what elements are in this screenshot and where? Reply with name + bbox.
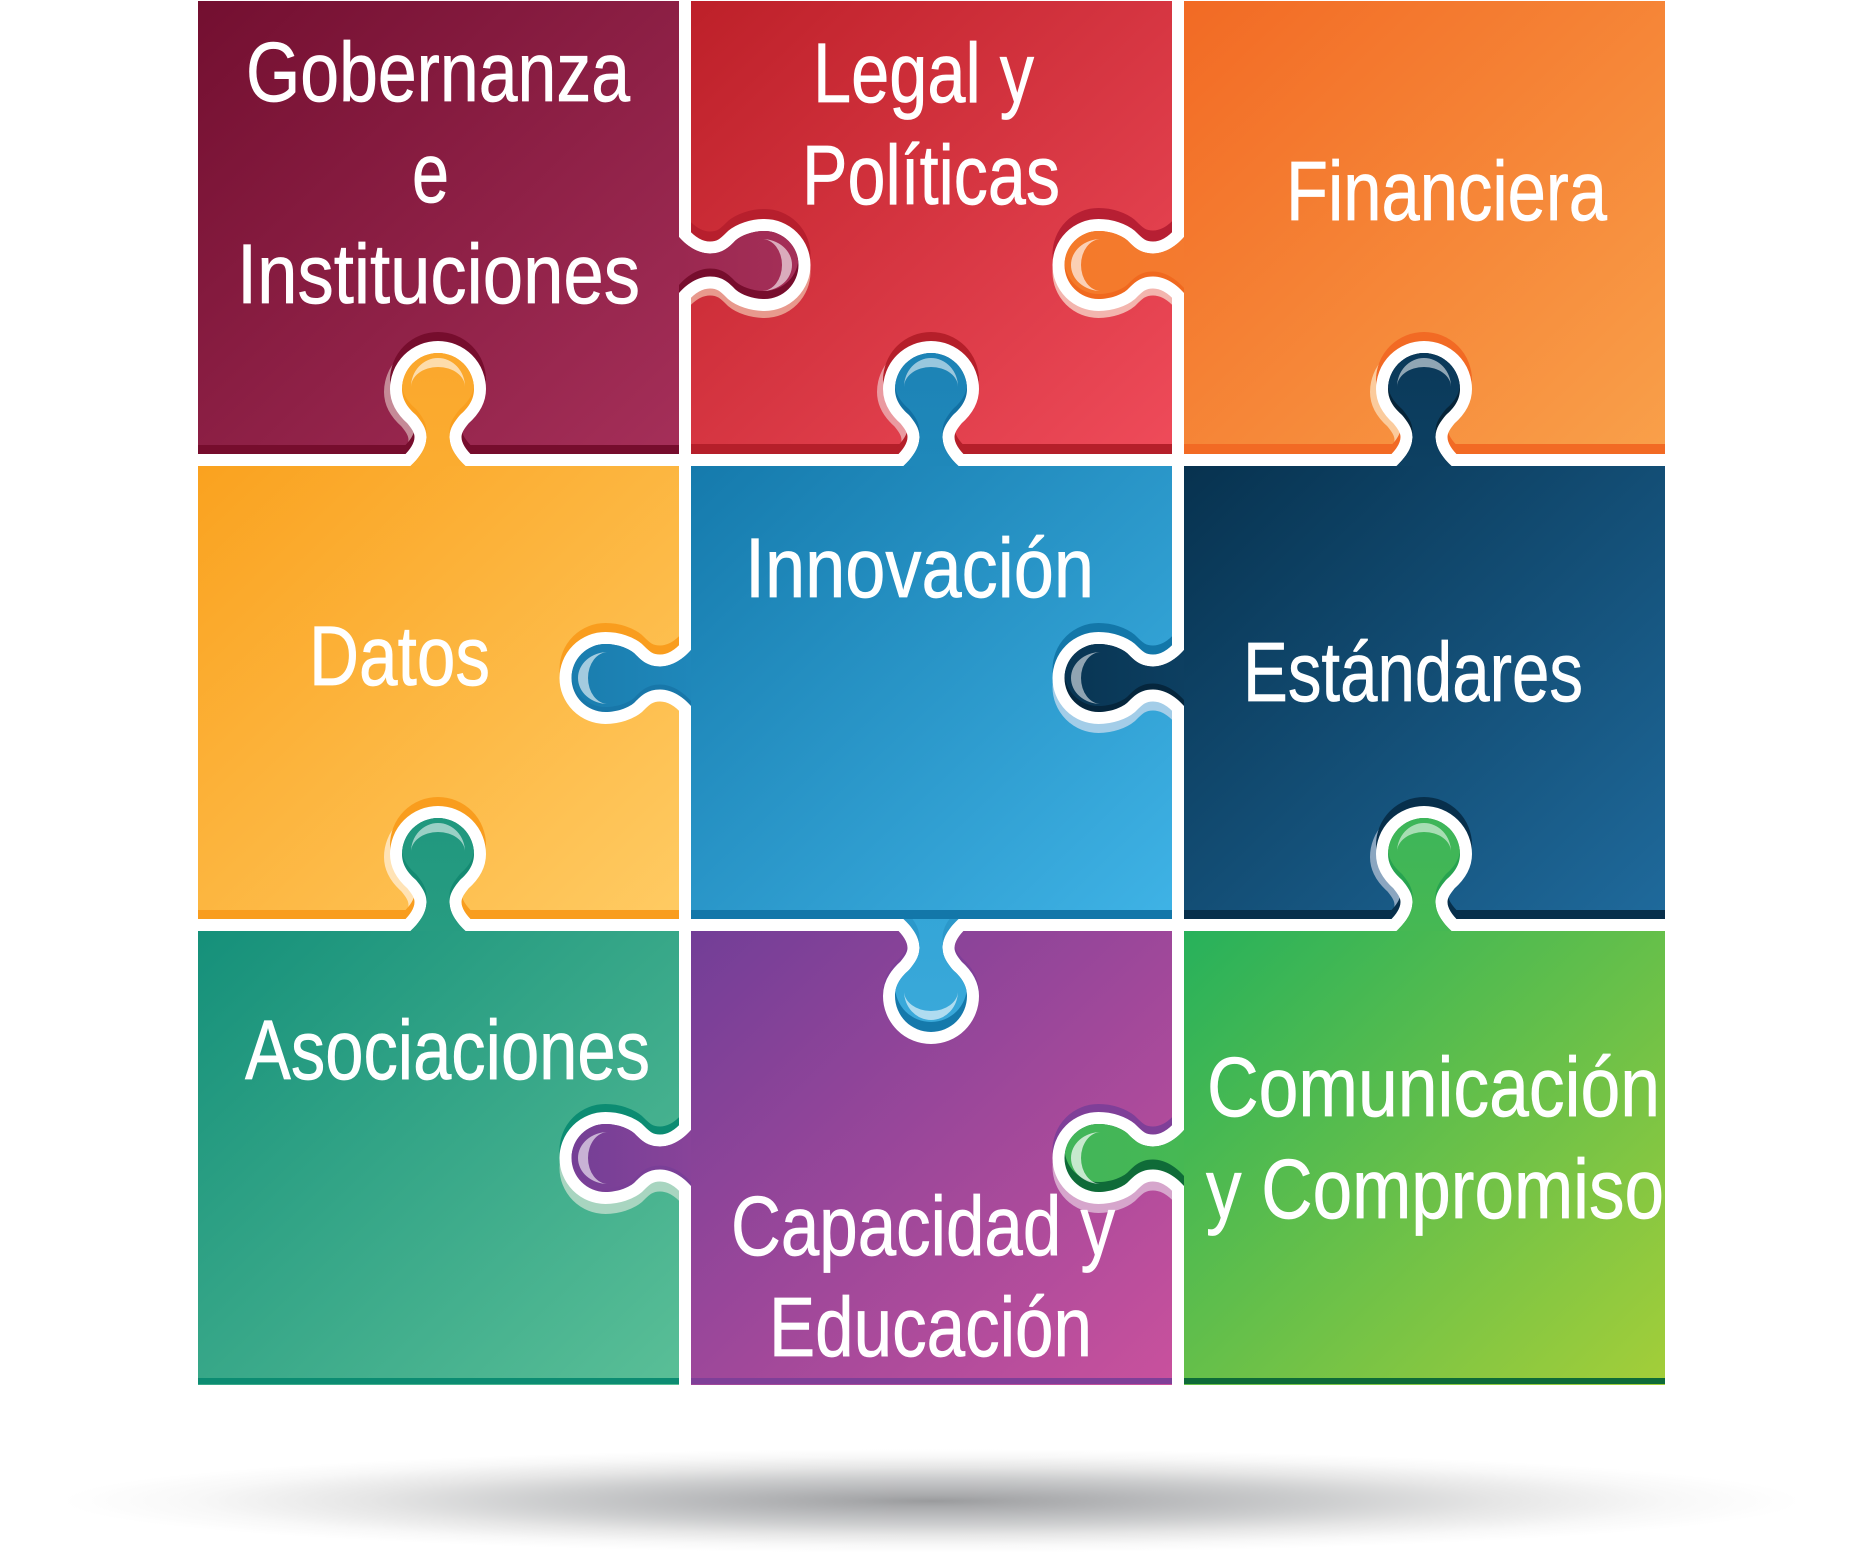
panel: Gobernanza e Instituciones <box>198 1 679 454</box>
connector: green tab into navy panel <box>1382 809 1464 934</box>
ground shadow <box>62 1449 1802 1553</box>
connector: blue tab into red panel <box>889 344 971 469</box>
heading: Comunicación y Compromiso <box>1206 1040 1664 1236</box>
heading: Comunicación y Compromiso: Comunicación <box>1207 1040 1660 1134</box>
panel: Innovación <box>691 466 1172 919</box>
heading: Legal y Políticas: Políticas <box>802 128 1060 222</box>
heading: Estándares: Estándares <box>1243 625 1583 719</box>
panel: Comunicación y Compromiso <box>1184 931 1665 1385</box>
puzzle panels <box>198 1 1665 1385</box>
panel: Estándares <box>1184 466 1665 919</box>
connector: blue tab into purple panel <box>891 909 971 1032</box>
connector: orange tab into red panel <box>1064 220 1184 306</box>
heading: Capacidad y Educación <box>731 1179 1115 1374</box>
connector: blue tab into amber panel <box>572 635 691 712</box>
heading: Asociaciones: Asociaciones <box>245 1003 650 1097</box>
heading: Gobernanza e Instituciones <box>237 25 640 321</box>
heading: Innovación: Innovación <box>745 521 1094 615</box>
connector: navy tab into orange panel <box>1382 344 1464 469</box>
panel: Datos <box>198 466 679 919</box>
heading: Comunicación y Compromiso: y Compromiso <box>1206 1142 1664 1236</box>
heading: Capacidad y Educación: Capacidad y <box>731 1179 1115 1273</box>
panel: Capacidad y Educación <box>691 931 1172 1385</box>
panel: Financiera <box>1184 1 1665 454</box>
connector: green tab into purple panel <box>1064 1114 1184 1201</box>
connector: teal tab into amber panel <box>396 809 478 934</box>
heading: Legal y Políticas <box>802 26 1060 222</box>
connector: amber tab into maroon panel <box>396 344 478 469</box>
heading: Legal y Políticas: Legal y <box>813 26 1034 120</box>
puzzle connectors <box>396 220 1464 1202</box>
heading: Gobernanza e Instituciones: Gobernanza <box>246 25 630 119</box>
heading: Gobernanza e Instituciones: Instituciones <box>237 227 640 321</box>
panel: Asociaciones <box>198 931 679 1385</box>
heading: Capacidad y Educación: Educación <box>769 1280 1092 1374</box>
heading: Financiera: Financiera <box>1286 144 1607 238</box>
heading: Gobernanza e Instituciones: e <box>412 126 449 220</box>
connector: maroon tab into red panel <box>679 221 798 306</box>
heading: Datos: Datos <box>309 609 490 703</box>
connector: navy tab into blue panel <box>1064 635 1184 721</box>
connector: purple tab into teal panel <box>572 1116 691 1202</box>
panel: Legal y Políticas <box>691 1 1172 454</box>
